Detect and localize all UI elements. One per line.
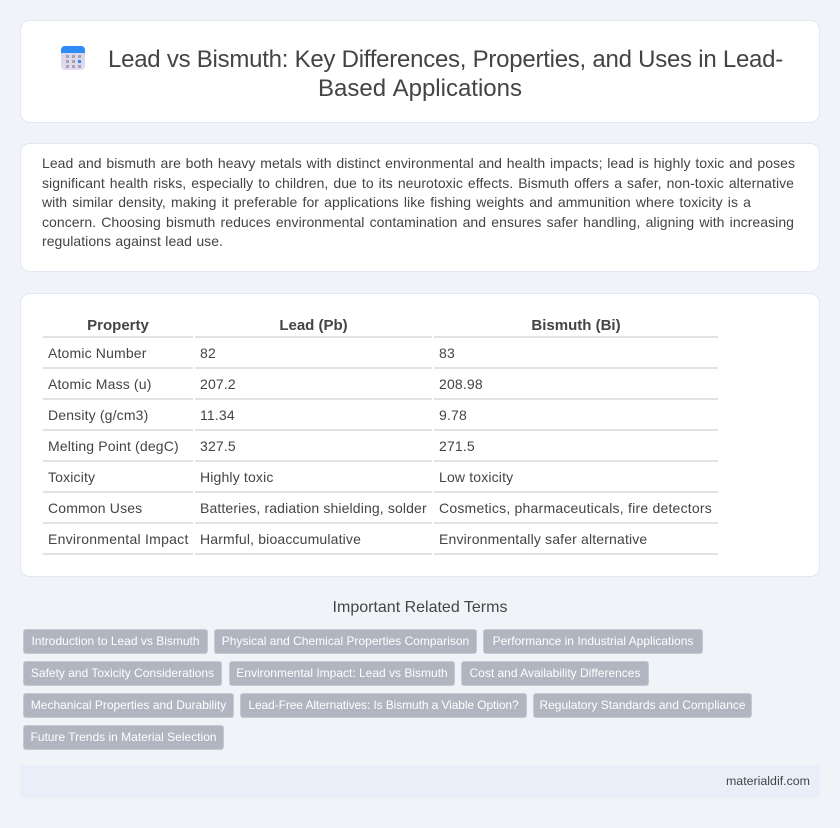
title [108,46,783,102]
footer source: materialdif.com [726,774,810,788]
row: atomic mass: 207.2 [200,376,236,392]
row: density: Density (g/cm3) [48,407,148,423]
table header: Lead (Pb) [279,317,348,334]
header card [20,20,820,123]
row: environmental impact: Environmentally safer alternative [439,531,647,547]
row: melting point: Melting Point (degC) [48,438,179,454]
tag: Introduction to Lead vs Bismuth [31,634,200,648]
tag: Future Trends in Material Selection [30,730,217,744]
table header: Property [87,317,149,334]
tag: Environmental Impact: Lead vs Bismuth [236,666,448,680]
tag [214,629,477,654]
row: atomic number: Atomic Number [48,345,147,361]
tag: Lead-Free Alternatives: Is Bismuth a Viable Option? [248,698,519,712]
row: environmental impact: Harmful, bioaccumulative [200,531,361,547]
footer [20,765,820,798]
row: common uses: Batteries, radiation shielding, solder [200,500,427,516]
intro text: significant health risks, especially to children, due to its neurotoxic effects. Bismuth offers a safer, non-toxic alternative [42,174,794,190]
row: common uses: Common Uses [48,500,142,516]
intro text: regulations against lead use. [42,233,223,249]
row: environmental impact: Environmental Impact [48,531,189,547]
tag: Performance in Industrial Applications [493,634,693,648]
icon: calendar [61,46,85,70]
row: common uses [48,500,712,516]
row: atomic mass: 208.98 [439,376,483,392]
tag: Regulatory Standards and Compliance [539,698,746,712]
tag [483,629,703,654]
intro text: with similar density, making it preferable for applications like fishing weights and ammunition where toxicity is a [42,194,751,210]
related terms tags [23,629,752,750]
row: common uses: Cosmetics, pharmaceuticals, fire detectors [439,500,712,516]
tag [533,693,752,718]
tag [23,725,224,750]
tag [23,629,208,654]
row: atomic mass: Atomic Mass (u) [48,376,152,392]
tag: Safety and Toxicity Considerations [31,666,214,680]
tag: Physical and Chemical Properties Comparison [222,634,469,648]
comparison table card [20,293,820,577]
row: density: 11.34 [200,407,235,423]
row: environmental impact [48,531,647,547]
row: atomic number: 83 [439,345,455,361]
tag [229,661,455,686]
row: atomic number: 82 [200,345,216,361]
tag: Cost and Availability Differences [470,666,640,680]
intro text: concern. Choosing bismuth reduces environmental contamination and ensures safer handling, aligning with increasing [42,214,794,230]
intro card [20,143,820,272]
row: melting point [48,438,475,454]
title: Based Applications [318,75,522,102]
tag [461,661,649,686]
row: toxicity: Highly toxic [200,469,274,485]
row: density: 9.78 [439,407,467,423]
tag [23,693,234,718]
tag: Mechanical Properties and Durability [31,698,226,712]
row: toxicity: Low toxicity [439,469,513,485]
row: toxicity: Toxicity [48,469,95,485]
tag [240,693,527,718]
title: Lead vs Bismuth: Key Differences, Properties, and Uses in Lead- [108,46,783,73]
row: atomic number [48,345,455,361]
related terms heading: Important Related Terms [333,599,507,616]
row: density [48,407,467,423]
row: melting point: 327.5 [200,438,236,454]
row: melting point: 271.5 [439,438,475,454]
intro text [42,155,795,249]
row: atomic mass [48,376,483,392]
comparison table [43,317,718,555]
row: toxicity [48,469,514,485]
table header: Bismuth (Bi) [531,317,621,334]
tag [23,661,222,686]
table header [87,317,621,334]
intro text: Lead and bismuth are both heavy metals with distinct environmental and health impacts; lead is highly toxic and poses [42,155,795,171]
